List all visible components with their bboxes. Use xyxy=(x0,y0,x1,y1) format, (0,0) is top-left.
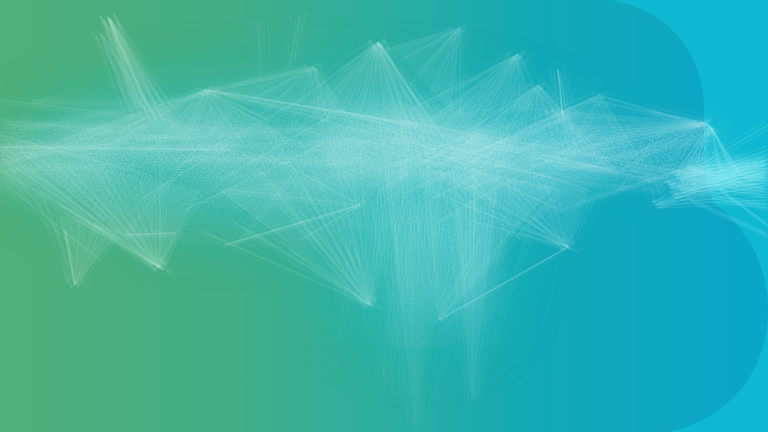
translucent fan areas xyxy=(26,30,702,310)
lighter right edge outside the rounded shape xyxy=(610,0,768,432)
speckled mesh texture xyxy=(0,90,720,340)
highlighted strands xyxy=(0,17,568,320)
soft glow behind the network xyxy=(0,110,768,310)
teal tint under the network xyxy=(0,80,600,350)
bright mesh cluster at right edge xyxy=(652,122,768,238)
